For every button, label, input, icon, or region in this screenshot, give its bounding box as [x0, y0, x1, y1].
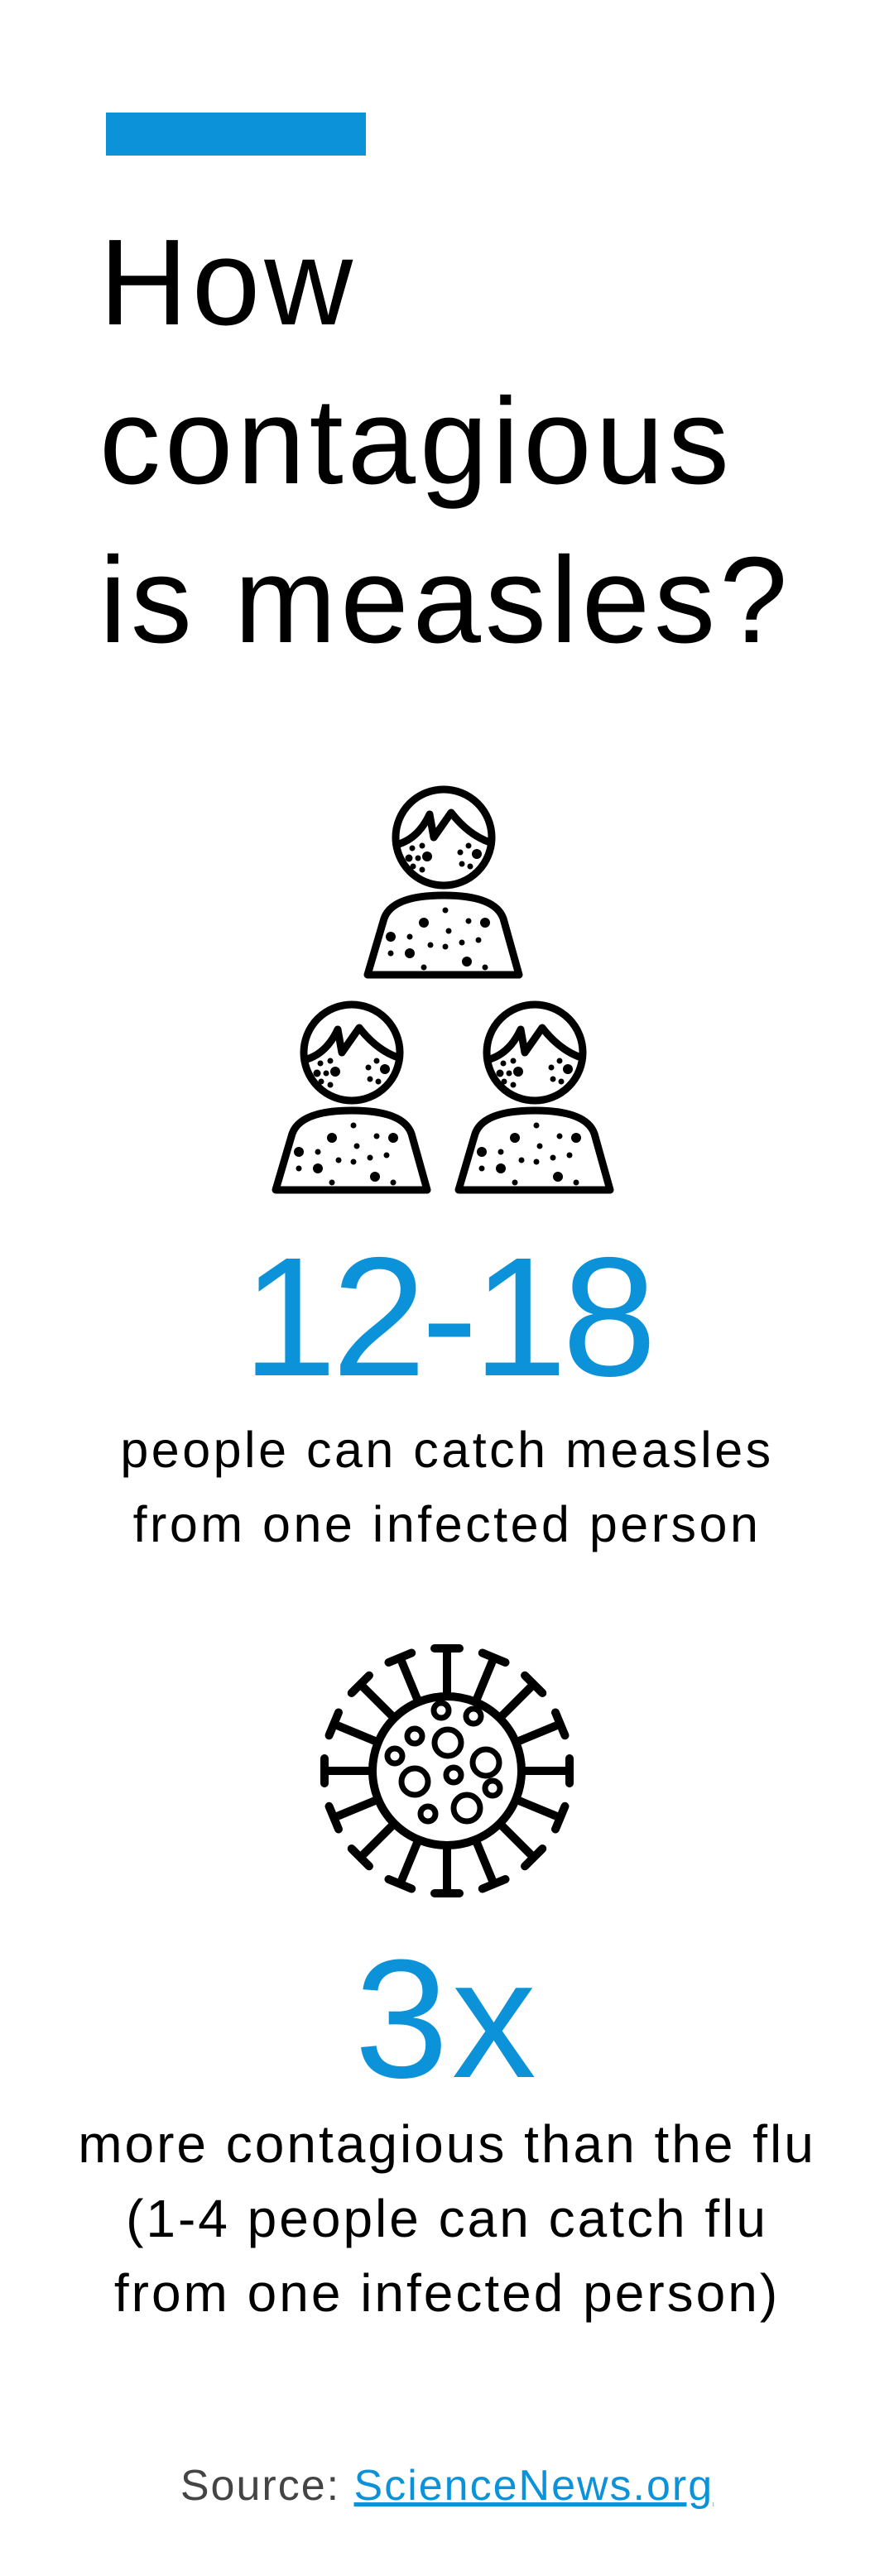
icon: virus [320, 1644, 574, 1897]
title: How [99, 214, 357, 351]
person: bottom left [276, 1005, 427, 1190]
icon: three infected people [272, 786, 614, 1193]
text: more contagious than the flu [78, 2114, 816, 2323]
title: contagious [99, 373, 733, 510]
person: top [368, 789, 519, 975]
text: more contagious than the flu: more contagious than the flu [78, 2114, 816, 2174]
big number: 3x: 3x [354, 1925, 540, 2113]
source: Source: ScienceNews.org [180, 2462, 714, 2510]
text: people can catch measles: people can catch measles [120, 1422, 774, 1478]
accent bar [106, 113, 366, 156]
text: people can catch measles [120, 1422, 774, 1552]
title: is measles? [99, 532, 791, 669]
text: more contagious than the flu: from one infected person) [114, 2263, 780, 2323]
text: people can catch measles: from one infected person [133, 1496, 761, 1552]
title [99, 214, 791, 669]
person: bottom right [459, 1005, 610, 1190]
text: more contagious than the flu: (1-4 people can catch flu [126, 2189, 768, 2248]
big number: 12-18: 12-18 [243, 1222, 651, 1412]
